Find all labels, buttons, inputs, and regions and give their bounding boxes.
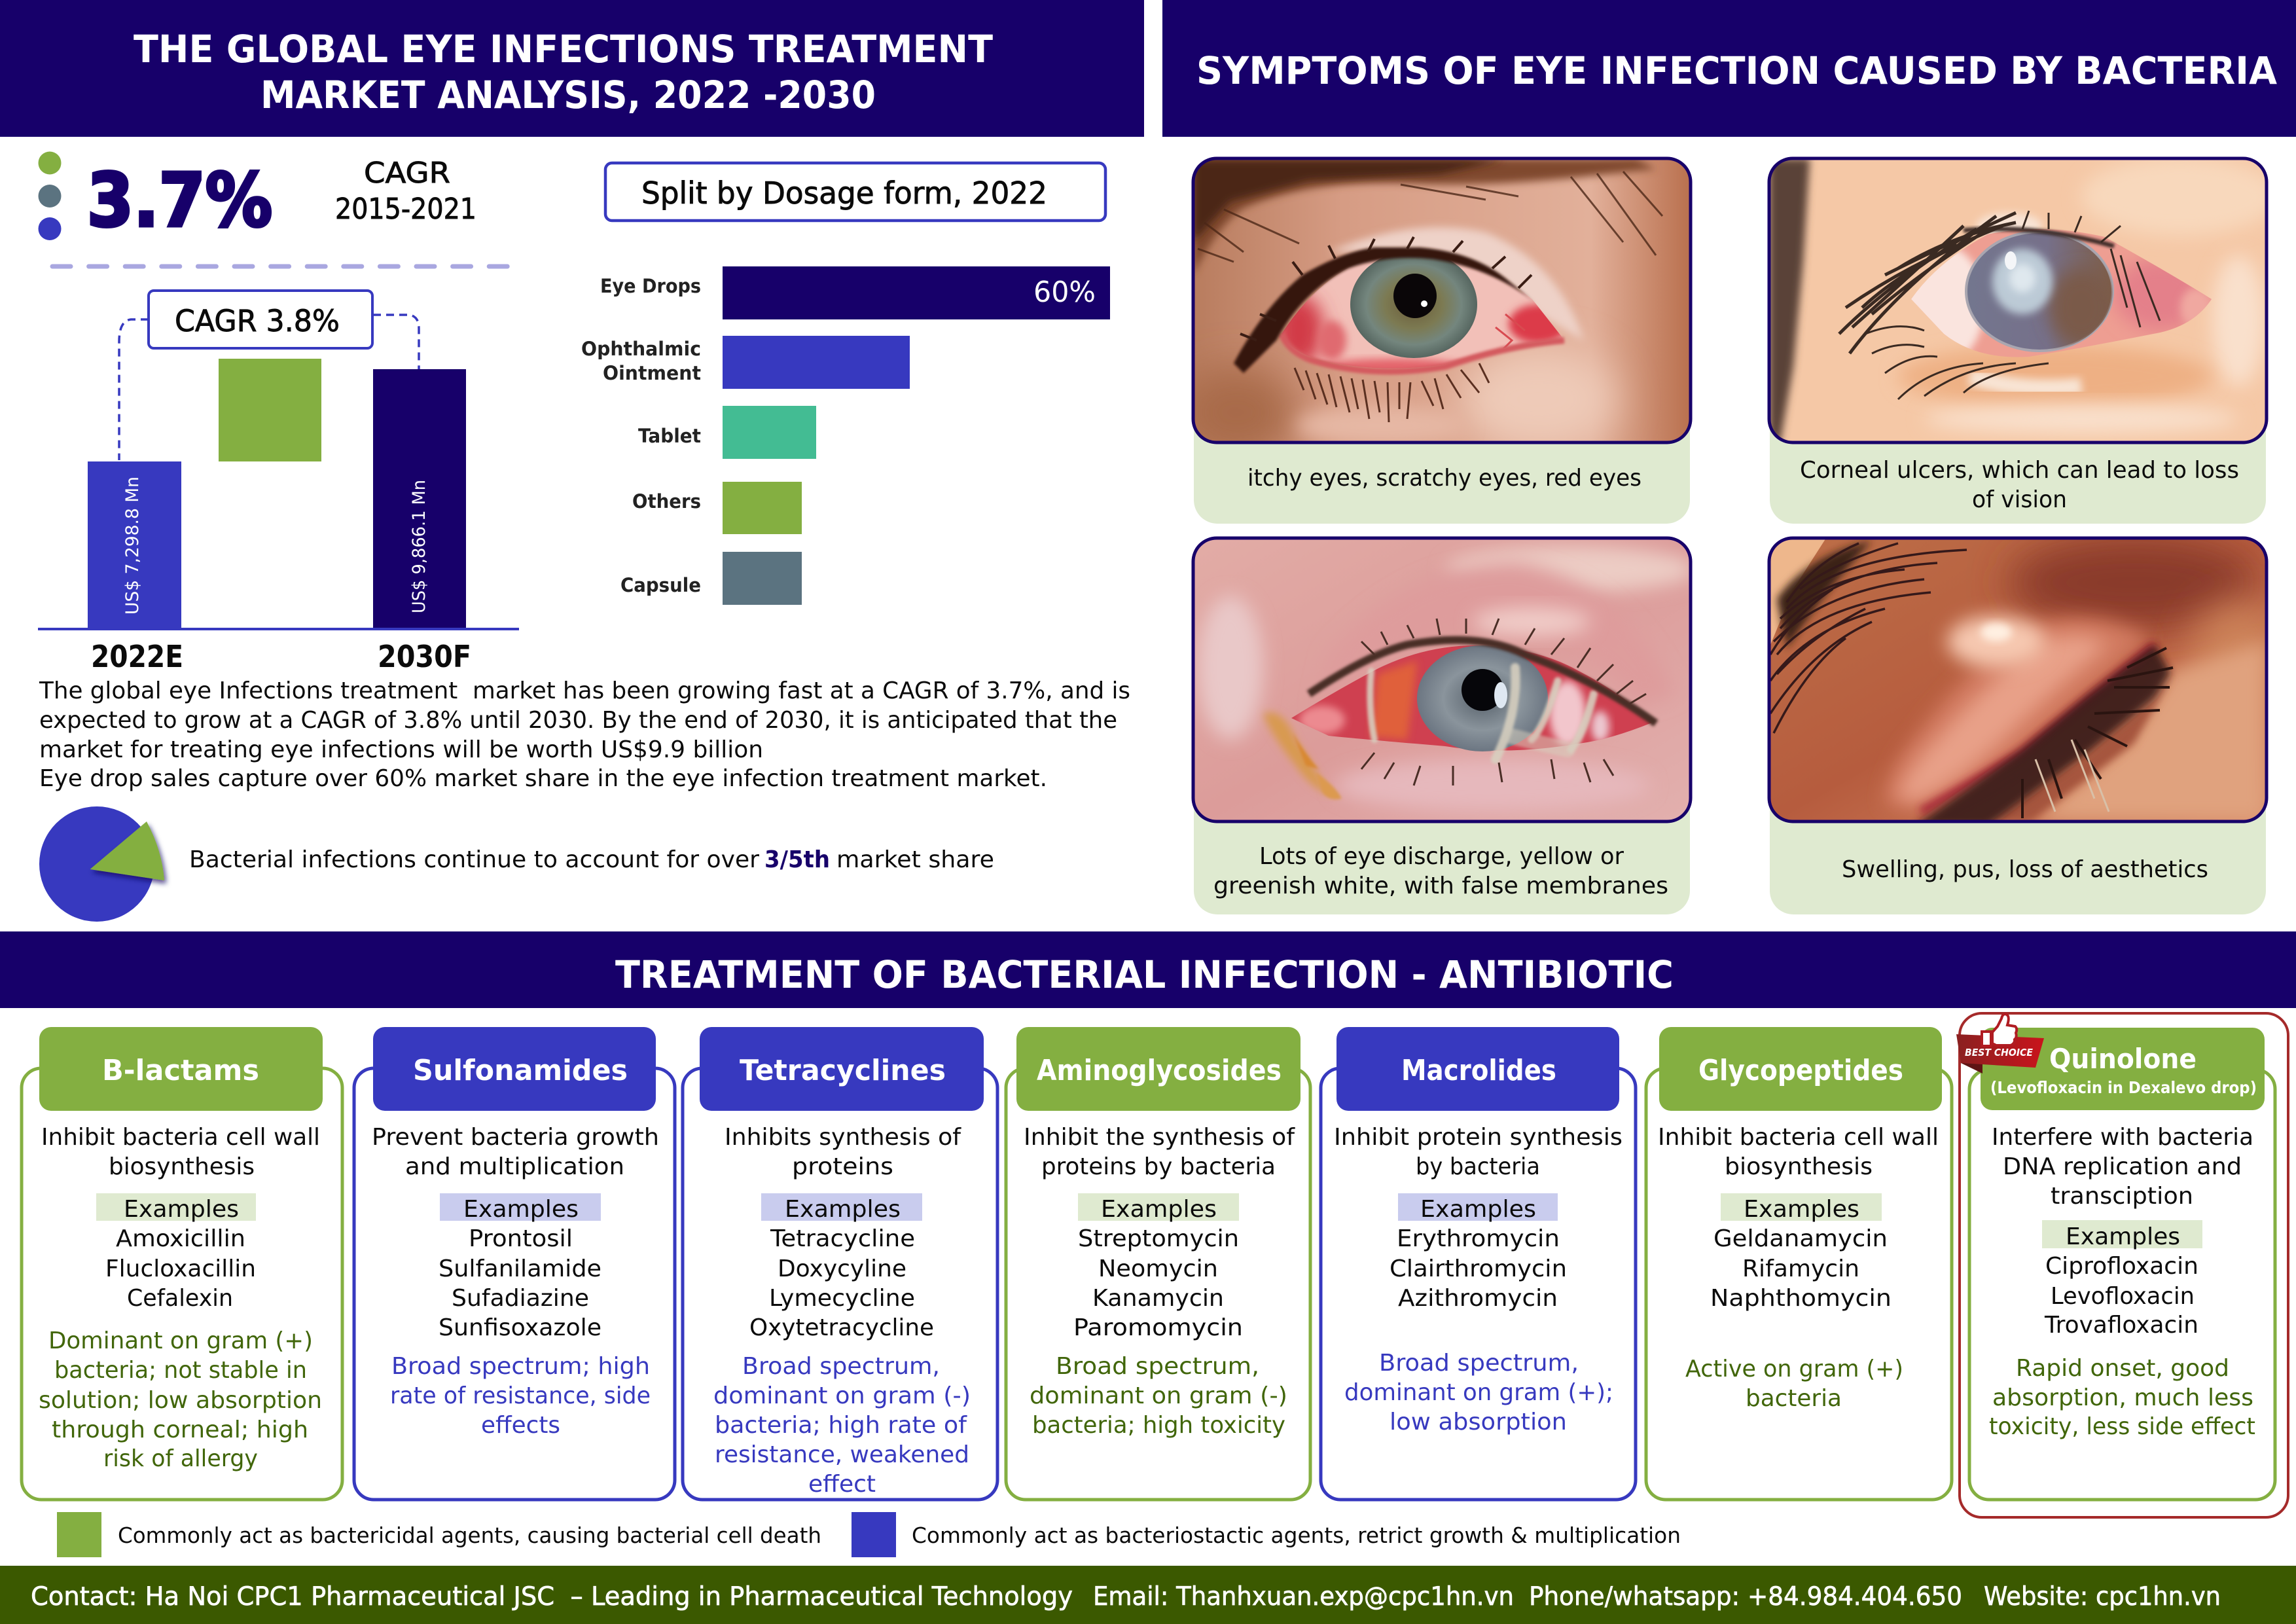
section heading: treatment	[0, 931, 2296, 1008]
mechanism	[1024, 1124, 1295, 1180]
examples: Sufadiazine	[452, 1285, 589, 1312]
header: market analysis title	[0, 0, 1144, 137]
examples: Neomycin	[1098, 1255, 1218, 1282]
stat label: CAGR 2015-2021: CAGR	[364, 156, 450, 190]
badge: best choice: BEST CHOICE	[1965, 1047, 2034, 1058]
examples: Tetracycline	[770, 1225, 915, 1252]
panel: symptom card, eye discharge: Lots of eye discharge, yellow or	[1259, 843, 1624, 870]
examples: Amoxicillin	[116, 1225, 245, 1252]
notes: toxicity, less side effect	[1989, 1413, 2255, 1440]
column header: (Levofloxacin in Dexalevo drop)	[1990, 1078, 2257, 1097]
examples: Cefalexin	[127, 1285, 233, 1312]
mechanism	[1992, 1124, 2253, 1210]
examples: Sunfisoxazole	[439, 1314, 601, 1341]
axis labels	[91, 639, 471, 674]
examples: Examples	[124, 1196, 239, 1223]
panel: symptom card, corneal ulcers	[1769, 157, 2278, 524]
examples: Examples	[1744, 1196, 1859, 1223]
panel: symptom card, corneal ulcers: of vision	[1972, 486, 2067, 513]
mechanism: proteins	[792, 1153, 893, 1180]
examples	[1710, 1193, 1892, 1312]
footer: contact details: Website: cpc1hn.vn	[1984, 1582, 2221, 1612]
text block: market summary: expected to grow at a CAGR of 3.8% until 2030. By the end of 2030, it is anticipated that the	[39, 707, 1117, 734]
notes: Broad spectrum,	[1056, 1353, 1259, 1380]
column header: Glycopeptides	[1698, 1054, 1903, 1087]
legend: bacteriostatic agents: Commonly act as bacteriostactic agents, retrict growth & multiplication	[912, 1523, 1681, 1548]
notes: effects	[481, 1412, 560, 1439]
notes: risk of allergy	[103, 1445, 258, 1472]
notes: low absorption	[1390, 1409, 1567, 1435]
dashed connector lines	[119, 315, 419, 460]
callout: CAGR 3.8%	[149, 291, 372, 348]
examples: Examples	[785, 1196, 901, 1223]
photo: eye with discharge	[1193, 538, 1695, 821]
notes: Broad spectrum,	[742, 1353, 940, 1380]
examples: Prontosil	[469, 1225, 573, 1252]
column header: Quinolone	[2049, 1043, 2197, 1075]
footer: contact details: Phone/whatsapp: +84.984.404.650	[1529, 1582, 1962, 1612]
examples: Clairthromycin	[1390, 1255, 1567, 1282]
panel: symptom card, itchy eyes	[1178, 158, 1691, 524]
mechanism: Prevent bacteria growth	[372, 1124, 659, 1151]
notes: dominant on gram (-)	[1030, 1382, 1287, 1409]
examples: Oxytetracycline	[749, 1314, 934, 1341]
bar: ophthalmic ointment: Ointment	[603, 362, 701, 384]
dashed divider	[52, 264, 509, 268]
bar: tablet	[638, 406, 816, 459]
mechanism: by bacteria	[1416, 1153, 1540, 1180]
footer: contact details: Contact: Ha Noi CPC1 Pharmaceutical JSC – Leading in Pharmaceutical Technology	[31, 1582, 1073, 1612]
bar: ophthalmic ointment: Ophthalmic	[581, 338, 701, 360]
panel: Quinolone best choice	[1956, 1013, 2288, 1517]
column header: Macrolides	[1401, 1054, 1556, 1087]
notes: absorption, much less	[1992, 1384, 2253, 1411]
notes: rate of resistance, side	[390, 1382, 651, 1409]
examples	[2042, 1220, 2202, 1339]
notes: bacteria	[1746, 1385, 1842, 1412]
legend: bactericidal agents	[57, 1512, 821, 1557]
column header: B-lactams	[102, 1054, 259, 1087]
mechanism	[1334, 1124, 1623, 1180]
panel: Aminoglycosides	[1006, 1027, 1310, 1500]
examples: Rifamycin	[1742, 1255, 1859, 1282]
photo frame	[1193, 538, 1691, 821]
notes	[713, 1353, 971, 1498]
notes	[390, 1353, 651, 1439]
mechanism: Inhibit the synthesis of	[1024, 1124, 1295, 1151]
mechanism	[372, 1124, 659, 1180]
header: market analysis title: THE GLOBAL EYE INFECTIONS TREATMENT	[134, 27, 993, 71]
column header	[373, 1027, 656, 1111]
mechanism: DNA replication and	[2003, 1153, 2242, 1180]
examples: Sulfanilamide	[439, 1255, 601, 1282]
notes: effect	[808, 1471, 876, 1498]
examples: Doxycyline	[778, 1255, 906, 1282]
photo: red eye	[1178, 158, 1691, 458]
panel: symptom card, eye discharge	[1193, 538, 1695, 914]
bar: tablet: Tablet	[638, 425, 701, 447]
examples	[1390, 1193, 1567, 1312]
notes: bacteria; high rate of	[715, 1412, 967, 1439]
bar: capsule: Capsule	[620, 574, 701, 596]
text block: market summary: market for treating eye infections will be worth US$9.9 billion	[39, 736, 763, 763]
text block: market summary: Eye drop sales capture over 60% market share in the eye infection treatment market.	[39, 765, 1047, 792]
header: symptoms title: SYMPTOMS OF EYE INFECTION CAUSED BY BACTERIA	[1196, 48, 2277, 93]
examples: Examples	[1101, 1196, 1217, 1223]
notes: through corneal; high	[52, 1416, 308, 1443]
examples: Paromomycin	[1073, 1314, 1243, 1341]
bar: others	[632, 482, 802, 534]
section heading: treatment: TREATMENT OF BACTERIAL INFECTION - ANTIBIOTIC	[615, 952, 1674, 997]
examples	[749, 1193, 934, 1341]
header: market analysis title: MARKET ANALYSIS, 2022 -2030	[260, 73, 876, 117]
footer: contact details: Email: Thanhxuan.exp@cpc1hn.vn	[1093, 1582, 1514, 1612]
text block: market summary: The global eye Infections treatment market has been growing fast at a CAGR of 3.7%, and is	[39, 677, 1130, 704]
notes: Broad spectrum,	[1379, 1350, 1579, 1377]
column header	[1336, 1027, 1619, 1111]
bar chart: dosage form split	[581, 266, 1110, 605]
panel: Macrolides	[1321, 1027, 1636, 1500]
notes: bacteria; not stable in	[54, 1357, 307, 1384]
mechanism: transciption	[2051, 1183, 2193, 1210]
panel: symptom card, eye discharge: greenish white, with false membranes	[1213, 873, 1668, 899]
column header: Aminoglycosides	[1037, 1054, 1282, 1087]
panel: Sulfonamides	[354, 1027, 675, 1500]
mechanism: Inhibit protein synthesis	[1334, 1124, 1623, 1151]
examples: Examples	[2066, 1223, 2180, 1250]
badge: best choice	[1956, 1014, 2044, 1074]
examples: Lymecycline	[769, 1285, 915, 1312]
examples: Examples	[1420, 1196, 1536, 1223]
examples: Azithromycin	[1398, 1285, 1558, 1312]
mechanism: Inhibit bacteria cell wall	[41, 1124, 320, 1151]
panel: symptom card, corneal ulcers: Corneal ulcers, which can lead to loss	[1800, 457, 2239, 484]
mechanism	[41, 1124, 320, 1180]
column header	[700, 1027, 984, 1111]
notes: Broad spectrum; high	[391, 1353, 650, 1380]
column header: Tetracyclines	[740, 1054, 946, 1087]
bar: eye drops	[600, 266, 1110, 319]
examples	[96, 1193, 256, 1312]
stat label: CAGR 2015-2021	[335, 156, 476, 226]
examples: Geldanamycin	[1713, 1225, 1888, 1252]
bar: eye drops: 60%	[1033, 276, 1096, 309]
axis labels: 2022E	[91, 639, 183, 674]
footer: contact details	[0, 1566, 2296, 1624]
mechanism	[1658, 1124, 1939, 1180]
stat label: CAGR 2015-2021: 2015-2021	[335, 192, 476, 226]
header: symptoms title	[1162, 0, 2296, 137]
mechanism: proteins by bacteria	[1041, 1153, 1276, 1180]
column header	[1659, 1027, 1942, 1111]
callout: CAGR 3.8%: CAGR 3.8%	[175, 304, 340, 338]
notes: dominant on gram (+);	[1344, 1379, 1613, 1406]
bar: ophthalmic ointment	[581, 336, 910, 389]
chart: market growth 2022E to 2030F	[38, 291, 519, 674]
examples: Streptomycin	[1078, 1225, 1239, 1252]
column header	[1981, 1028, 2265, 1110]
notes: Rapid onset, good	[2016, 1355, 2229, 1382]
photo frame	[1769, 158, 2267, 442]
bar: 2030F	[373, 369, 466, 629]
column header	[39, 1027, 323, 1111]
bar: 2022E: US$ 7,298.8 Mn	[122, 477, 143, 615]
mechanism	[725, 1124, 961, 1180]
notes: Active on gram (+)	[1685, 1356, 1903, 1382]
panel: symptom card, itchy eyes: itchy eyes, scratchy eyes, red eyes	[1247, 465, 1641, 492]
legend: bacteriostatic agents	[852, 1512, 1681, 1557]
axis line	[38, 628, 519, 630]
photo frame	[1193, 158, 1691, 442]
notes	[39, 1327, 322, 1472]
mechanism: Inhibit bacteria cell wall	[1658, 1124, 1939, 1151]
legend: bactericidal agents: Commonly act as bactericidal agents, causing bacterial cell death	[118, 1523, 821, 1548]
photo: swollen eyelid	[1769, 537, 2284, 826]
pie chart: bacterial infection share	[39, 806, 164, 922]
column header: Sulfonamides	[413, 1054, 628, 1087]
examples: Examples	[463, 1196, 579, 1223]
panel: Glycopeptides	[1646, 1027, 1952, 1500]
notes: Dominant on gram (+)	[48, 1327, 313, 1354]
examples	[439, 1193, 601, 1341]
text: bacterial share statement: 3/5th	[764, 846, 830, 873]
photo: corneal ulcer eye	[1769, 157, 2278, 442]
notes: solution; low absorption	[39, 1387, 322, 1414]
panel: symptom card, swelling	[1769, 537, 2284, 914]
growth block	[219, 359, 321, 461]
axis labels: 2030F	[378, 639, 471, 674]
text block: market summary	[39, 677, 1130, 792]
notes	[1344, 1350, 1613, 1435]
notes	[1989, 1355, 2255, 1440]
chart heading: split by dosage form	[605, 163, 1105, 221]
icon: three status dots	[38, 152, 62, 240]
mechanism: Interfere with bacteria	[1992, 1124, 2253, 1151]
bar: 2030F: US$ 9,866.1 Mn	[409, 480, 429, 613]
mechanism: and multiplication	[405, 1153, 624, 1180]
panel: Tetracyclines	[683, 1027, 997, 1500]
bar: capsule	[620, 552, 802, 605]
big stat: 3.7%: 3.7%	[87, 158, 272, 244]
notes: dominant on gram (-)	[713, 1382, 971, 1409]
chart heading: split by dosage form: Split by Dosage form, 2022	[641, 175, 1047, 211]
mechanism: biosynthesis	[1725, 1153, 1873, 1180]
bar: others: Others	[632, 490, 701, 513]
examples: Levofloxacin	[2051, 1283, 2195, 1310]
notes	[1030, 1353, 1287, 1439]
notes	[1685, 1356, 1903, 1412]
photo frame	[1769, 538, 2267, 821]
bar: eye drops: Eye Drops	[600, 275, 701, 297]
examples: Flucloxacillin	[105, 1255, 256, 1282]
bar: 2022E	[88, 461, 181, 629]
notes: bacteria; high toxicity	[1032, 1412, 1285, 1439]
examples: Ciprofloxacin	[2045, 1253, 2198, 1280]
examples: Naphthomycin	[1710, 1285, 1892, 1312]
text: bacterial share statement: Bacterial infections continue to account for over	[189, 846, 759, 873]
panel: B-lactams	[22, 1027, 342, 1500]
panel: symptom card, swelling: Swelling, pus, loss of aesthetics	[1842, 856, 2208, 883]
examples: Trovafloxacin	[2044, 1312, 2198, 1339]
examples: Kanamycin	[1092, 1285, 1224, 1312]
examples: Erythromycin	[1397, 1225, 1560, 1252]
mechanism: Inhibits synthesis of	[725, 1124, 961, 1151]
text: bacterial share statement: market share	[836, 846, 994, 873]
mechanism: biosynthesis	[109, 1153, 255, 1180]
column header	[1016, 1027, 1300, 1111]
notes: resistance, weakened	[715, 1441, 969, 1468]
examples	[1073, 1193, 1243, 1341]
